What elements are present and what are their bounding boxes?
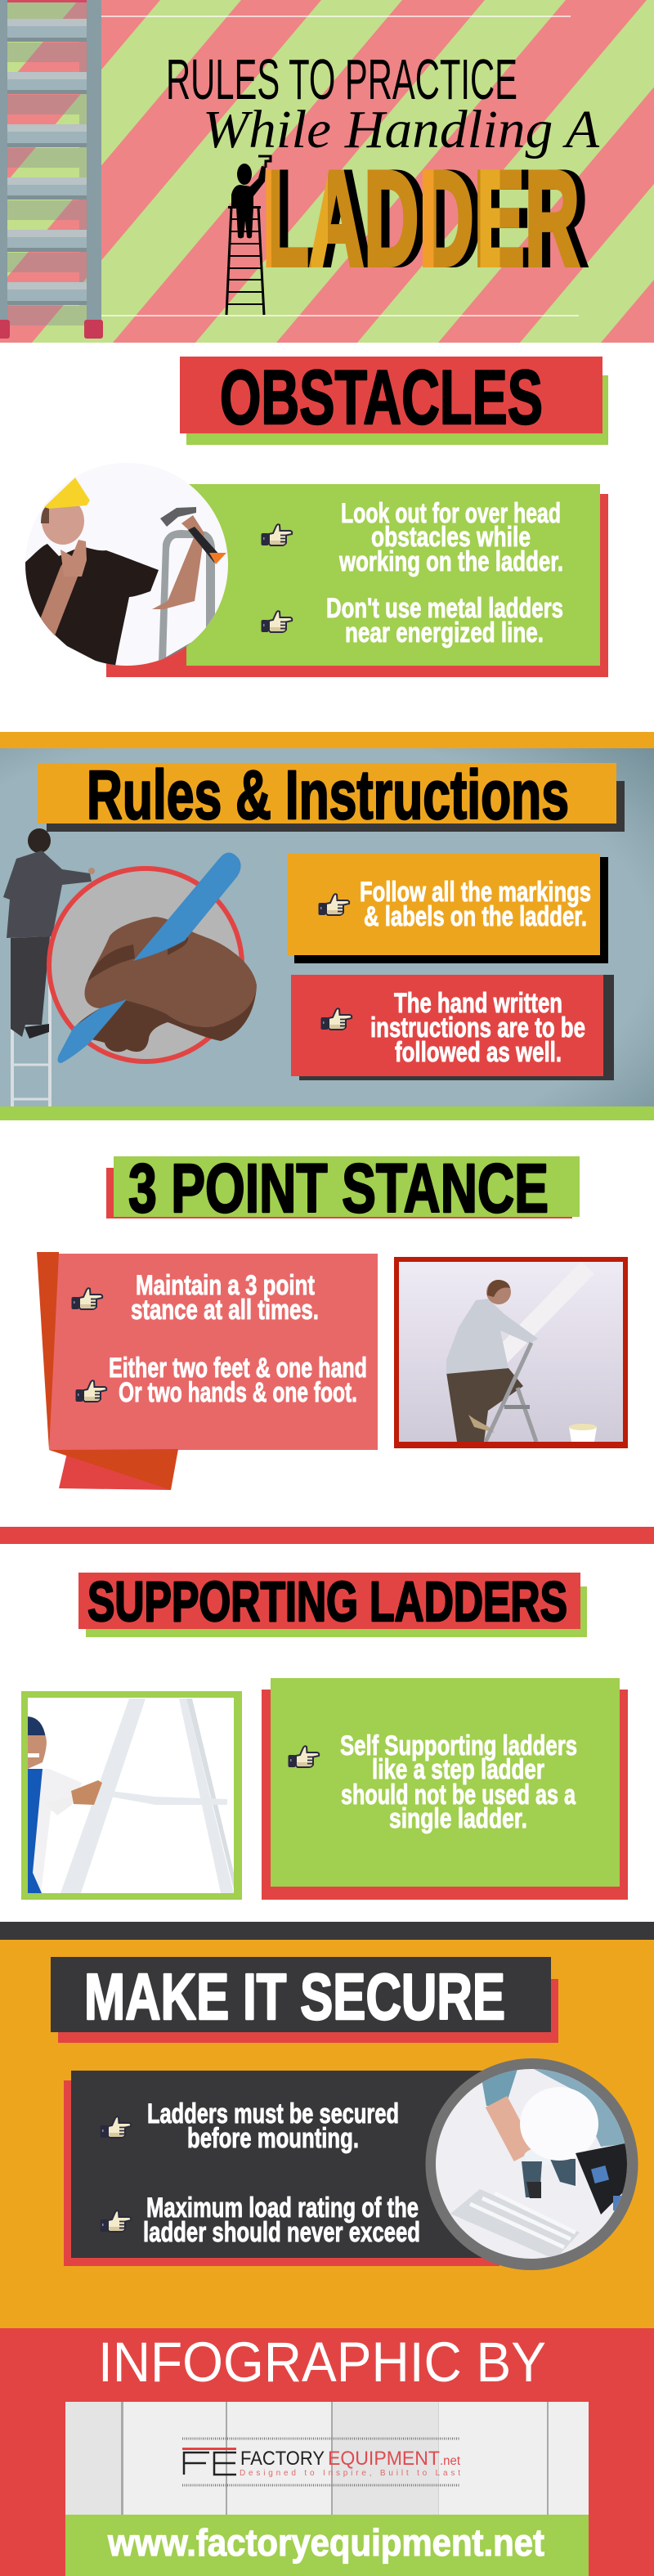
callout text: The hand written xyxy=(394,988,562,1019)
icon: thumb pointer xyxy=(319,894,349,915)
logo mark FE xyxy=(182,2448,236,2475)
striped background xyxy=(0,0,654,343)
tip text 1: working on the ladder. xyxy=(338,546,563,577)
panel: self supporting ladders xyxy=(262,1678,628,1900)
stance text 1 xyxy=(131,1270,319,1326)
icon: thumb pointer xyxy=(72,1288,102,1309)
photo: worker holding helmet xyxy=(425,2058,638,2270)
callout: hand written instructions xyxy=(291,975,614,1080)
title line 2: While Handling A xyxy=(203,100,600,159)
icon: painter on ladder xyxy=(226,156,271,315)
tip text 1: before mounting. xyxy=(187,2123,359,2154)
stance text 2 xyxy=(109,1353,367,1408)
section: make it secure xyxy=(0,1922,654,2328)
panel: securing tips xyxy=(64,2071,499,2266)
tip text 1: Ladders must be secured xyxy=(147,2098,399,2129)
tip text 1 xyxy=(147,2098,399,2154)
heading banner: make it secure: MAKE IT SECURE xyxy=(84,1960,505,2033)
website bar xyxy=(65,2515,589,2576)
photo: worker with hammer xyxy=(25,478,228,666)
photo: worker beside ladder xyxy=(21,1691,242,1900)
panel text: should not be used as a xyxy=(341,1779,576,1811)
callout text: & labels on the ladder. xyxy=(364,901,587,932)
section: infographic by footer xyxy=(0,2328,654,2576)
icon: thumb pointer xyxy=(262,524,292,545)
tip text 1 xyxy=(338,498,563,577)
website bar: www.factoryequipment.net xyxy=(107,2521,544,2564)
section: supporting ladders xyxy=(0,1527,654,1900)
heading banner: make it secure xyxy=(51,1957,558,2043)
photo: man climbing step ladder xyxy=(394,1257,628,1448)
decorative ladder xyxy=(0,0,103,339)
icon: thumb pointer xyxy=(100,2116,131,2138)
callout text xyxy=(360,877,591,932)
stance text 1: stance at all times. xyxy=(131,1295,319,1326)
panel: obstacles tips xyxy=(106,484,608,677)
icon: thumb pointer xyxy=(288,1746,319,1767)
photo: man writing on wall from ladder xyxy=(3,828,95,1106)
section: rules and instructions xyxy=(0,732,654,1120)
tip text 2 xyxy=(143,2192,420,2248)
section: obstacles xyxy=(23,354,608,677)
tip text 2 xyxy=(326,593,563,648)
icon: thumb pointer xyxy=(262,611,292,632)
panel text xyxy=(340,1730,577,1834)
tip text 2: ladder should never exceed xyxy=(143,2217,420,2248)
section: 3 point stance xyxy=(37,1150,628,1490)
callout text: instructions are to be xyxy=(370,1012,585,1043)
logo panel on wood planks: .net xyxy=(440,2454,461,2468)
icon: thumb pointer xyxy=(320,1008,352,1030)
logo wordmark: FACTORY xyxy=(240,2448,325,2470)
tip text 1: obstacles while xyxy=(371,522,531,553)
panel text: Self Supporting ladders xyxy=(340,1730,577,1761)
icon: thumb pointer xyxy=(75,1380,106,1402)
stance text 1: Maintain a 3 point xyxy=(136,1270,315,1301)
stance text 2: Or two hands & one foot. xyxy=(119,1377,357,1408)
panel text: single ladder. xyxy=(389,1803,527,1834)
panel: stance ribbon xyxy=(37,1252,378,1490)
tip text 2: Don't use metal ladders xyxy=(326,593,563,624)
icon: thumb pointer xyxy=(100,2210,131,2232)
tip text 1: Look out for over head xyxy=(341,498,561,529)
callout text xyxy=(370,988,585,1068)
icon: hand writing with pen xyxy=(49,852,257,1063)
stance text 2: Either two feet & one hand xyxy=(109,1353,367,1384)
logo panel on wood planks xyxy=(65,2402,589,2515)
footer heading: INFOGRAPHIC BY xyxy=(98,2331,546,2394)
callout: markings and labels xyxy=(288,854,608,963)
logo panel on wood planks: EQUIPMENT xyxy=(328,2448,440,2470)
panel text: like a step ladder xyxy=(372,1754,544,1785)
tip text 2: near energized line. xyxy=(345,617,544,648)
tip text 2: Maximum load rating of the xyxy=(146,2192,419,2224)
logo tagline: Designed to Inspire, Built to Last xyxy=(240,2469,460,2478)
header panel xyxy=(0,0,654,343)
callout text: followed as well. xyxy=(395,1037,562,1068)
